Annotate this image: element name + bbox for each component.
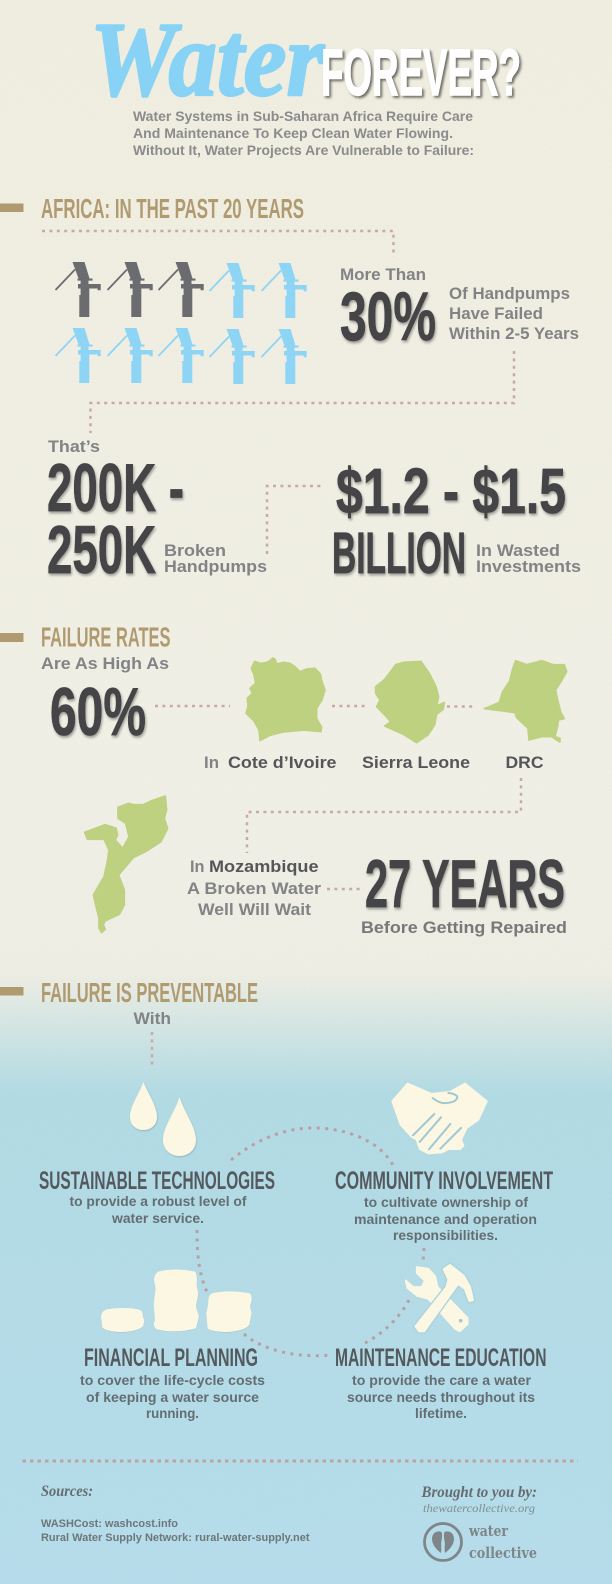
subtitle: And Maintenance To Keep Clean Water Flowing. — [133, 125, 453, 141]
icon: wrench and hammer — [406, 1263, 475, 1333]
block: community involvement: maintenance and operation — [354, 1211, 537, 1227]
icon: handshake — [392, 1084, 487, 1153]
credit: brought to you by: Brought to you by: — [421, 1484, 537, 1501]
section heading: Failure rates — [0, 622, 170, 652]
icon: water drops — [130, 1082, 196, 1156]
dotted arc between technologies and community — [231, 1128, 394, 1167]
block: sustainable technologies: to provide a robust level of — [70, 1193, 247, 1209]
dotted connector to handpump stat — [42, 231, 394, 257]
title — [90, 1, 521, 118]
stat: $1.2-$1.5 billion wasted: In Wasted — [476, 541, 560, 560]
text: with: With — [134, 1009, 171, 1028]
stat: 200K-250K broken handpumps: Handpumps — [164, 557, 267, 576]
country labels: Cote d’Ivoire — [228, 754, 336, 772]
block: sustainable technologies: SUSTAINABLE TECHNOLOGIES — [39, 1167, 275, 1195]
dotted connector to 27 years — [327, 888, 363, 890]
dotted connector to broken handpumps — [90, 351, 514, 433]
sources: Sources: — [41, 1483, 93, 1500]
section heading: Africa — [0, 193, 304, 224]
stat: 30% of handpumps failed: 30% — [340, 278, 436, 355]
title: Water — [90, 1, 326, 118]
text: Mozambique broken well — [187, 857, 321, 919]
section heading: Africa: AFRICA: IN THE PAST 20 YEARS — [41, 193, 304, 224]
stat: 27 years before repair — [361, 846, 567, 937]
stat: 200K-250K broken handpumps: 200K - — [47, 450, 184, 526]
text: Mozambique broken well: A Broken Water — [187, 879, 321, 898]
stat: $1.2-$1.5 billion wasted: Investments — [476, 557, 581, 576]
sources: WASHCost: washcost.info — [41, 1518, 178, 1530]
block: financial planning — [80, 1344, 265, 1421]
pictogram: ten handpumps, three failed — [56, 262, 307, 384]
block: sustainable technologies: water service. — [111, 1210, 204, 1226]
dotted connectors around lower icons — [197, 1230, 424, 1356]
section heading: Failure is preventable: FAILURE IS PREVENTABLE — [41, 977, 258, 1008]
maps: Cote d'Ivoire, Sierra Leone, DRC — [246, 658, 567, 743]
stat: 30% of handpumps failed: More Than — [340, 265, 426, 284]
block: maintenance education: source needs throughout its — [347, 1389, 535, 1405]
dotted connector to country maps — [155, 705, 476, 708]
section heading: Failure rates: FAILURE RATES — [41, 622, 170, 652]
logo: water collective: water — [468, 1522, 509, 1540]
logo: water collective — [424, 1522, 537, 1562]
dotted connector to drops — [151, 1032, 153, 1067]
logo: water collective: collective — [469, 1544, 537, 1562]
stat: 60% failure rate — [41, 654, 169, 750]
block: community involvement: to cultivate ownership of — [364, 1194, 528, 1210]
footer divider — [22, 1460, 578, 1462]
dotted connector to wasted investments — [267, 486, 324, 554]
subtitle: Without It, Water Projects Are Vulnerable to Failure: — [133, 142, 474, 158]
block: maintenance education — [335, 1344, 546, 1421]
block: maintenance education: to provide the care a water — [352, 1372, 532, 1388]
stat: 60% failure rate: 60% — [50, 674, 146, 750]
dotted connector to Mozambique — [247, 778, 521, 853]
text: Mozambique broken well: Mozambique — [209, 858, 318, 876]
country labels — [204, 753, 544, 772]
subtitle — [133, 108, 474, 158]
text: Mozambique broken well: Well Will Wait — [198, 900, 311, 919]
stat: $1.2-$1.5 billion wasted — [332, 455, 581, 586]
block: financial planning: running. — [146, 1405, 199, 1421]
country labels: In — [204, 753, 219, 772]
block: financial planning: of keeping a water source — [86, 1389, 259, 1405]
sources — [41, 1483, 310, 1544]
text: Mozambique broken well: In — [190, 857, 204, 876]
block: financial planning: to cover the life-cycle costs — [80, 1372, 265, 1388]
block: community involvement — [335, 1167, 553, 1243]
stat: 200K-250K broken handpumps: 250K — [47, 512, 156, 588]
stat: $1.2-$1.5 billion wasted: BILLION — [332, 521, 466, 586]
stat: 27 years before repair: Before Getting Repaired — [361, 918, 567, 937]
block: sustainable technologies — [39, 1167, 275, 1226]
sources: Rural Water Supply Network: rural-water-supply.net — [41, 1532, 310, 1544]
block: maintenance education: lifetime. — [415, 1405, 467, 1421]
stat: 30% of handpumps failed: Have Failed — [449, 304, 543, 323]
section heading: Failure is preventable — [0, 977, 258, 1008]
icon: coin stacks — [101, 1269, 252, 1332]
stat: 200K-250K broken handpumps — [47, 437, 267, 588]
block: financial planning: FINANCIAL PLANNING — [84, 1344, 258, 1372]
subtitle: Water Systems in Sub-Saharan Africa Require Care — [133, 108, 473, 124]
stat: 30% of handpumps failed: Within 2-5 Years — [449, 324, 579, 343]
country labels: DRC — [506, 754, 544, 772]
stat: 30% of handpumps failed — [340, 265, 579, 355]
stat: 30% of handpumps failed: Of Handpumps — [449, 284, 570, 303]
country labels: Sierra Leone — [362, 754, 470, 772]
stat: 200K-250K broken handpumps: That’s — [48, 437, 100, 456]
credit: brought to you by: thewatercollective.org — [423, 1501, 535, 1515]
map: Mozambique — [85, 796, 168, 933]
block: community involvement: responsibilities. — [393, 1227, 498, 1243]
stat: 200K-250K broken handpumps: Broken — [164, 541, 226, 560]
stat: 60% failure rate: Are As High As — [41, 654, 169, 673]
credit: brought to you by — [421, 1484, 537, 1515]
